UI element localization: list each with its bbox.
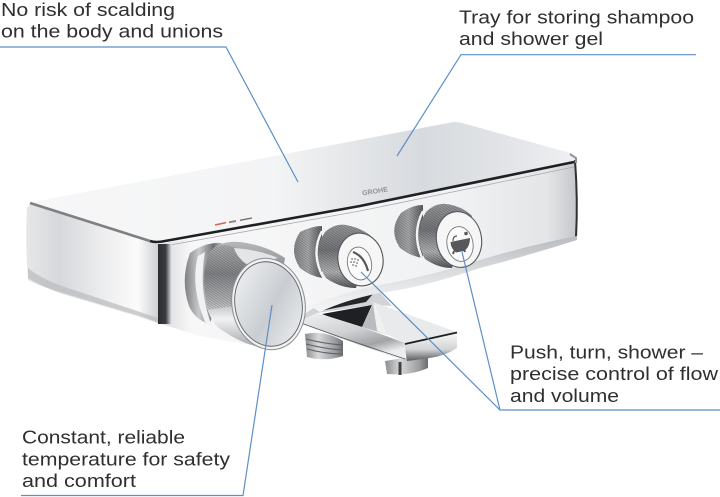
- text: push turn shower: Push, turn, shower –: [510, 342, 704, 362]
- text: push turn shower: precise control of flow: [510, 363, 719, 384]
- left end face: [26, 204, 158, 323]
- spout dark wedge: [322, 305, 372, 327]
- left face bottom shade: [28, 268, 158, 322]
- back ring: [394, 205, 423, 258]
- right edge: [575, 160, 577, 237]
- cylinder top highlight: [234, 248, 278, 266]
- spout pyramid facet: [362, 304, 388, 335]
- text: no risk of scalding: on the body and unions: [1, 20, 223, 41]
- logo mark: GROHE: [362, 186, 389, 197]
- button face: [432, 208, 486, 271]
- spout main slab: [298, 313, 405, 359]
- leader: tray: [397, 55, 696, 156]
- flange: [185, 243, 226, 324]
- underside band: [310, 236, 577, 312]
- icon: shower: [351, 252, 368, 271]
- temperature mark: [215, 218, 252, 225]
- large temperature knob: [185, 242, 312, 356]
- text: tray for storing: Tray for storing shampoo: [459, 6, 694, 28]
- knurled cylinder: [203, 242, 285, 349]
- threaded connector right: [385, 354, 428, 375]
- spout neck: [298, 288, 392, 322]
- text: constant reliable temperature: Constant, reliable: [22, 426, 185, 448]
- spout end: [405, 332, 457, 361]
- text: push turn shower: and volume: [510, 385, 619, 406]
- back ring: [294, 226, 322, 278]
- button face: [334, 229, 387, 290]
- spout dark upper opening: [320, 293, 373, 311]
- text: tray for storing: and shower gel: [459, 28, 603, 49]
- tray front black groove: [150, 162, 574, 242]
- bath knob: [394, 204, 486, 271]
- shower knob: [294, 225, 387, 290]
- thermostat body: [26, 122, 577, 345]
- tray top surface: [30, 122, 575, 243]
- text: constant reliable temperature: temperature for safety: [22, 448, 231, 470]
- icon: bathtub: [450, 232, 470, 254]
- spout upper right facet: [373, 302, 457, 343]
- vertical dark band: [158, 244, 172, 324]
- leader: push turn shower: [361, 252, 720, 410]
- text: constant reliable temperature: and comfort: [22, 470, 137, 491]
- knurled cylinder: [419, 204, 472, 268]
- spout: [298, 288, 457, 375]
- product: thermostat and spout: [26, 122, 577, 375]
- knurled cylinder: [318, 225, 372, 288]
- spout end edge: [405, 332, 457, 344]
- leader: scalding: [0, 47, 298, 182]
- leader: temperature: [21, 305, 272, 496]
- right front face: [158, 162, 577, 345]
- knob face: [225, 252, 312, 356]
- threaded connector left: [305, 333, 343, 359]
